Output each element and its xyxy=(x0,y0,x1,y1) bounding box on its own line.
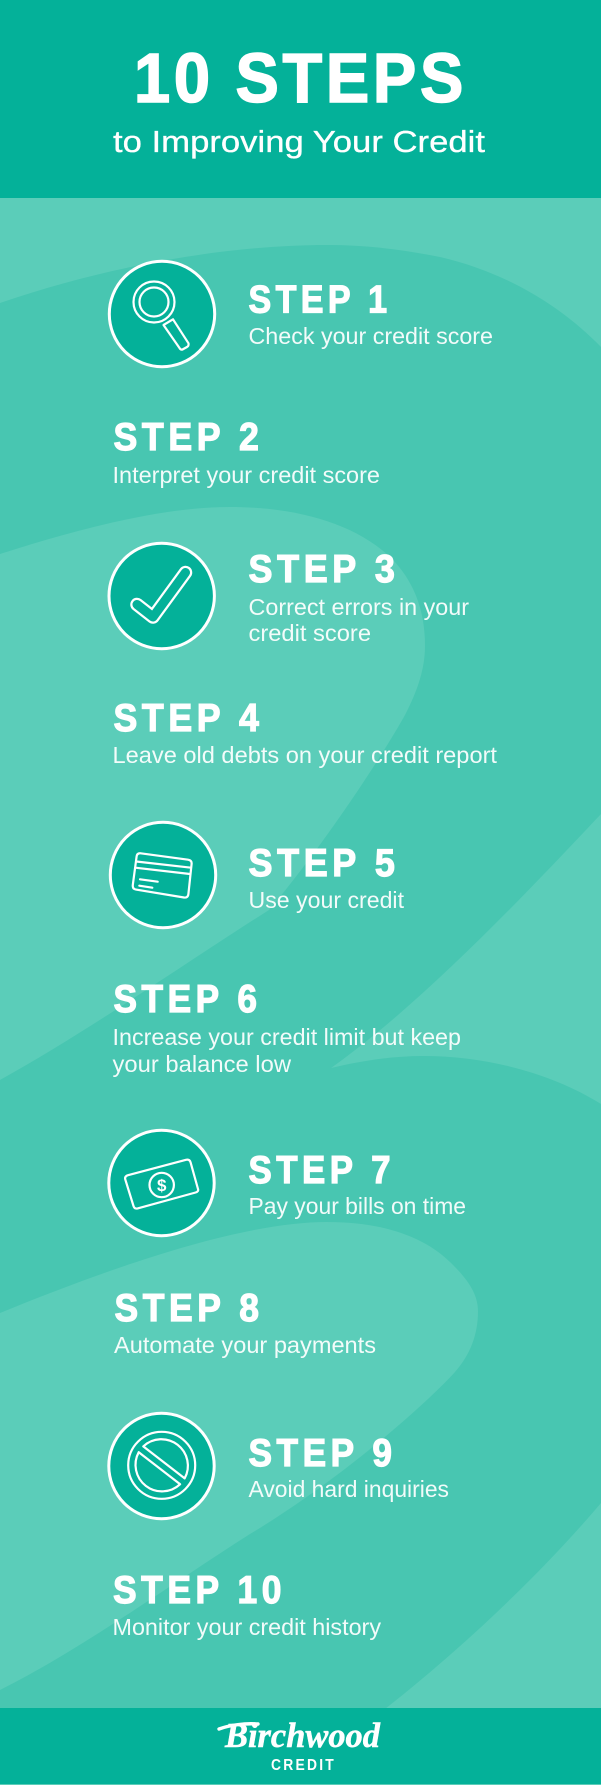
step 9 heading: STEP 9 xyxy=(248,1432,396,1475)
step 8 text: Automate your payments xyxy=(114,1332,376,1358)
step 3 heading: STEP 3 xyxy=(248,548,400,591)
step 6 heading: STEP 6 xyxy=(114,978,262,1021)
header band xyxy=(0,0,601,198)
logo: Birchwood Credit: Birchwood xyxy=(224,1716,380,1755)
step 3 xyxy=(109,543,469,649)
step 5 xyxy=(110,822,405,928)
logo: Birchwood Credit xyxy=(219,1716,380,1774)
step 1 heading: STEP 1 xyxy=(248,278,392,322)
title: 10 STEPS xyxy=(134,39,467,117)
step 1 text: Check your credit score xyxy=(248,323,493,349)
step 8 heading: STEP 8 xyxy=(114,1287,264,1330)
step 7 text: Pay your bills on time xyxy=(248,1193,466,1219)
step 3 text: Correct errors in your xyxy=(248,594,469,620)
step 8 xyxy=(114,1287,376,1358)
step 5 text: Use your credit xyxy=(248,887,405,913)
step 6 text: Increase your credit limit but keep xyxy=(112,1024,461,1050)
step 7 xyxy=(109,1130,466,1236)
icon: check mark xyxy=(109,543,214,649)
step 10 text: Monitor your credit history xyxy=(112,1614,382,1640)
step 5 heading: STEP 5 xyxy=(248,842,400,885)
step 6 xyxy=(112,978,461,1077)
step 6 text line 2: your balance low xyxy=(112,1051,291,1077)
step 2 text: Interpret your credit score xyxy=(112,462,380,488)
step 4 text: Leave old debts on your credit report xyxy=(112,742,498,768)
step 10 xyxy=(112,1569,382,1640)
step 1 xyxy=(109,261,493,367)
icon: dollar bill xyxy=(109,1130,214,1236)
icon: magnifying glass xyxy=(109,261,215,367)
icon: dollar bill: $ xyxy=(157,1176,167,1195)
step 4 heading: STEP 4 xyxy=(114,697,264,740)
step 2 xyxy=(112,416,380,488)
logo: Birchwood Credit: CREDIT xyxy=(271,1757,336,1774)
step 9 xyxy=(109,1413,449,1519)
step 3 text line 2: credit score xyxy=(248,620,371,646)
step 4 xyxy=(112,697,498,768)
icon: credit card xyxy=(110,822,216,928)
step 10 heading: STEP 10 xyxy=(113,1569,286,1612)
step 9 text: Avoid hard inquiries xyxy=(248,1476,449,1502)
step 2 heading: STEP 2 xyxy=(114,416,264,459)
step 7 heading: STEP 7 xyxy=(248,1149,395,1192)
footer band xyxy=(0,1708,601,1784)
subtitle: to Improving Your Credit xyxy=(113,124,485,159)
icon: prohibited sign xyxy=(109,1413,214,1519)
